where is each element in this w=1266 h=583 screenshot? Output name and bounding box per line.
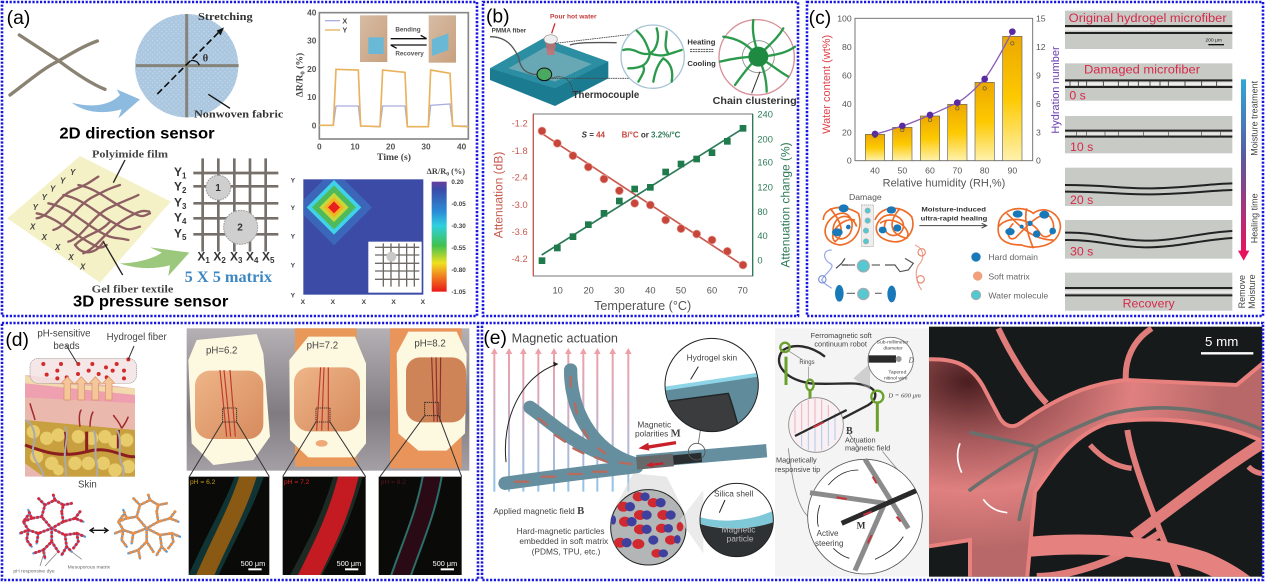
crossed gel fibers [10, 35, 105, 95]
scatter chart: attenuation vs temperature: 10 [552, 285, 563, 295]
scatter chart: attenuation vs temperature: 200 [757, 135, 773, 145]
micrograph: damaged 0 s: Damaged microfiber [1084, 62, 1200, 76]
scale bar: 5 mm [1205, 334, 1238, 349]
bar chart: water content and hydration: 60 [842, 71, 852, 81]
5 by 5 electrode grid: Y [174, 227, 182, 241]
micrograph: original: 200 μm [1205, 37, 1222, 43]
arrow: magnetic polarities: Magnetic [637, 419, 671, 429]
bar chart: water content and hydration: Water content (wt%) [821, 35, 833, 134]
colorbar: -0.55 [451, 245, 466, 252]
5 by 5 electrode grid: Y [174, 165, 182, 179]
scatter chart: attenuation vs temperature: 40 [645, 285, 656, 295]
line chart: bending response: 10 [307, 92, 317, 102]
polyimide film with gel fiber textile: Polyimide film [92, 149, 168, 160]
circle: actuation field detail: Actuation [845, 436, 876, 445]
polyimide film with gel fiber textile: Y [50, 185, 56, 194]
panel: ferromagnetic continuum robot: Sub-millimeter [877, 339, 909, 345]
polyimide film with gel fiber textile: X [67, 253, 74, 262]
panel label d: (d) [5, 330, 29, 351]
arrowheads [491, 348, 632, 354]
colorbar: -0.05 [451, 201, 466, 208]
heading: 3D pressure sensor: 3D pressure sensor [73, 294, 228, 311]
dendrite labels: pH responsive dye [13, 569, 55, 575]
line chart: bending response: ΔR/R [295, 75, 306, 97]
line chart: bending response: Recovery [395, 50, 424, 57]
scatter chart: attenuation vs temperature: -4.2 [512, 254, 528, 264]
5 by 5 electrode grid: 4 [254, 256, 259, 265]
polyimide film with gel fiber textile: Y [70, 168, 76, 177]
photo: patches at three pH values: pH=8.2 [414, 339, 446, 350]
5 by 5 electrode grid: X [230, 250, 238, 264]
5 by 5 electrode grid: Y [174, 196, 182, 210]
arrow: healing time [1238, 79, 1249, 261]
arrow: magnetic polarities [635, 419, 681, 468]
soft continuum robot deflection [505, 362, 767, 483]
white motion arrows [958, 443, 1007, 513]
polyimide film with gel fiber textile: Y [33, 203, 39, 212]
line chart: bending response: 30 [307, 36, 317, 46]
arrow: magnetic polarities: polarities M [635, 429, 681, 440]
line chart: bending response: 40 [307, 7, 317, 17]
5 by 5 electrode grid: Y [174, 211, 182, 225]
image: robot steering in vessels [927, 327, 1266, 583]
micrograph: 30 s [1065, 220, 1232, 259]
colorbar: -0.30 [451, 223, 466, 230]
legend: Hard domain [988, 252, 1038, 262]
bar chart: water content and hydration: 70 [953, 165, 962, 175]
circle: active steering: Magnetically [776, 456, 817, 465]
fluorescence image: pH 6.2: 500 μm [241, 559, 265, 568]
bar chart: water content and hydration: 60 [925, 165, 935, 175]
scatter chart: attenuation vs temperature: Attenuation change (%) [778, 142, 792, 268]
line chart: bending response: 20 [307, 64, 317, 74]
micrograph: original [1065, 11, 1232, 49]
scatter chart: attenuation vs temperature: -1.2 [512, 119, 528, 129]
circle: hard-magnetic particles: Hard-magnetic particles [517, 526, 605, 536]
arrow: blue [72, 89, 140, 118]
polymer network before healing: Damage [849, 192, 882, 202]
bar chart: water content and hydration: 80 [980, 165, 990, 175]
bar chart: water content and hydration: 15 [1036, 13, 1046, 23]
micrograph: 20 s [1065, 168, 1232, 207]
circle: polymer network before heating [621, 25, 684, 88]
heatmap: pressure map: Y [291, 234, 296, 241]
5 by 5 electrode grid: 1 [215, 183, 221, 194]
circle: hydrogel skin detail: Hydrogel skin [687, 353, 737, 363]
polymer network after healing [998, 208, 1060, 248]
side labels: Moisture [1247, 274, 1257, 309]
bar chart: water content and hydration: 100 [837, 13, 852, 23]
catheter branches [970, 408, 1266, 519]
scatter chart: attenuation vs temperature: -3.0 [512, 200, 528, 210]
vessel network [927, 328, 1266, 583]
polyimide film with gel fiber textile: X [79, 262, 86, 271]
scatter chart: attenuation vs temperature: 70 [737, 285, 748, 295]
nonwoven fabric disc: Stretching [198, 12, 254, 23]
panel: ferromagnetic continuum robot: continuum robot [814, 340, 867, 349]
circle: actuation field detail [789, 398, 890, 453]
arrow: moisture-induced healing: Moisture-induced [921, 206, 986, 213]
panel: ferromagnetic continuum robot [775, 328, 930, 577]
circle: hard-magnetic particles: Applied magnetic field B [493, 506, 584, 517]
polymer network before healing [823, 192, 913, 247]
5 by 5 electrode grid: 2 [182, 186, 187, 195]
line chart: bending response [295, 7, 468, 163]
line chart: bending response: 10 [350, 141, 360, 151]
circle: silica shell and magnetic particle: Magnetic [722, 525, 755, 535]
circle: hydrogel skin detail [665, 338, 760, 460]
legend: Water molecule [988, 290, 1048, 300]
circle: chain clustering: Chain clustering [713, 96, 797, 107]
panel: ferromagnetic continuum robot: Rings [799, 360, 815, 366]
nonwoven fabric disc: θ [203, 53, 209, 64]
micrograph: original: Original hydrogel microfiber [1069, 11, 1227, 25]
bar chart: water content and hydration: 40 [870, 165, 880, 175]
dendritic particle without dye [115, 495, 180, 558]
heading: 2D direction sensor: 2D direction sensor [59, 126, 215, 143]
circle: actuation field detail: magnetic field [845, 444, 890, 453]
fluorescence image: pH 6.2 [188, 476, 270, 575]
line chart: bending response: Bending [395, 27, 421, 34]
scatter chart: attenuation vs temperature: 160 [757, 158, 773, 168]
matrix label: 5 X 5 matrix [185, 269, 272, 286]
arrow: moisture-induced healing: ultra-rapid healing [921, 216, 987, 223]
heating and cooling arrows [687, 38, 716, 68]
water tray setup [490, 13, 640, 106]
scatter chart: attenuation vs temperature: 30 [614, 285, 625, 295]
applied magnetic field arrows [494, 353, 628, 492]
circle: hard-magnetic particles: (PDMS, TPU, etc.) [532, 547, 601, 557]
line chart: bending response: (%) [295, 53, 306, 71]
micrograph: damaged 0 s [1065, 62, 1232, 102]
heatmap: pressure map: X [421, 299, 426, 306]
heatmap: pressure map: Y [291, 292, 296, 299]
panel label c: (c) [809, 8, 831, 29]
5 by 5 electrode grid: X [246, 250, 254, 264]
bar chart: water content and hydration: 0 [1036, 156, 1041, 166]
bar chart: water content and hydration: 50 [898, 165, 907, 175]
panel label e: (e) [483, 328, 507, 349]
scatter chart: attenuation vs temperature: Attenuation (dB) [492, 152, 506, 238]
lower vessel [1030, 545, 1247, 583]
5 by 5 electrode grid: Y [174, 180, 182, 194]
panel: ferromagnetic continuum robot: Ferromagnetic soft [811, 331, 872, 340]
colorbar [427, 167, 466, 296]
nonwoven fabric disc [135, 12, 284, 120]
side labels: Healing time [1249, 193, 1259, 243]
heatmap: pressure map: X [362, 299, 367, 306]
bar chart: water content and hydration [821, 13, 1062, 190]
fluorescence image: pH 7.2: 500 μm [337, 559, 361, 568]
scatter chart: attenuation vs temperature: 20 [583, 285, 594, 295]
scatter chart: attenuation vs temperature: 0 [757, 255, 763, 265]
bar chart: water content and hydration: 12 [1036, 42, 1046, 52]
legend [971, 252, 1048, 300]
side labels: Remove [1237, 275, 1247, 308]
polyimide film with gel fiber textile: X [29, 222, 36, 231]
photo: patches at three pH values: pH=6.2 [206, 345, 237, 356]
water tray setup: Thermocouple [573, 90, 640, 101]
5 by 5 electrode grid: 4 [182, 217, 187, 226]
panel: (e) magnetic actuation [483, 328, 930, 577]
bar chart: water content and hydration: 6 [1036, 99, 1041, 109]
nonwoven fabric disc: Nonwoven fabric [194, 109, 284, 120]
5 by 5 electrode grid: 1 [205, 256, 210, 265]
scatter chart: attenuation vs temperature: 50 [676, 285, 686, 295]
heating and cooling arrows: Heating [687, 38, 716, 47]
heatmap: pressure map [291, 169, 426, 306]
arrow: green [120, 247, 189, 276]
circle: silica shell and magnetic particle: particle [727, 534, 754, 544]
heatmap: pressure map: Y [291, 262, 296, 269]
scatter chart: attenuation vs temperature: 120 [757, 183, 773, 193]
heatmap: pressure map: Y [291, 205, 296, 212]
line chart: bending response: 0 [312, 121, 317, 131]
circle: actuation field detail: B [846, 426, 853, 437]
zoom connector lines [189, 416, 462, 477]
bar chart: water content and hydration: 0 [847, 156, 852, 166]
main vessel [927, 359, 1266, 583]
scatter chart: attenuation vs temperature: Temperature (°C) [594, 299, 691, 313]
colorbar: 0 [446, 171, 449, 177]
scatter chart: attenuation vs temperature: -2.4 [512, 173, 528, 183]
photo: patches at three pH values: pH=7.2 [307, 340, 338, 351]
5 by 5 electrode grid: X [197, 250, 205, 264]
colorbar: -1.05 [451, 289, 466, 296]
circle: hard-magnetic particles: embedded in soft matrix [519, 536, 609, 546]
panel: (c) moisture healing [809, 8, 1259, 311]
skin block with hydrogel fiber: pH-sensitive [37, 329, 90, 340]
circle: active steering: M [857, 521, 866, 531]
water tray setup: PMMA fiber [492, 28, 527, 35]
skin block with hydrogel fiber: Skin [78, 480, 97, 491]
panel: (d) pH sensing [5, 328, 469, 583]
heating and cooling arrows: Cooling [687, 59, 716, 68]
polyimide film with gel fiber textile: Gel fiber textile [92, 285, 174, 296]
heatmap: pressure map: Y [291, 178, 296, 185]
fluorescence image: pH 7.2: pH = 7.2 [284, 479, 310, 486]
line chart: bending response: 0 [317, 141, 322, 151]
scatter chart: attenuation vs temperature: 60 [707, 285, 717, 295]
double-headed arrow [90, 528, 108, 533]
micrograph: 30 s: 30 s [1070, 245, 1093, 259]
5 by 5 electrode grid: 1 [182, 171, 187, 180]
legend: Soft matrix [988, 271, 1030, 281]
dendrite labels [13, 550, 111, 575]
dark background [929, 327, 1262, 577]
circle: chain clustering [713, 20, 797, 107]
colorbar: 0.20 [451, 179, 464, 186]
scatter chart: attenuation vs temperature: -3.6 [512, 227, 528, 237]
scatter chart: attenuation vs temperature: 240 [757, 109, 773, 119]
panel: ferromagnetic continuum robot: D [908, 355, 915, 364]
scatter chart: attenuation vs temperature [492, 109, 792, 313]
bar chart: water content and hydration: 20 [842, 127, 852, 137]
scatter chart: attenuation vs temperature: -1.8 [512, 146, 528, 156]
line chart: bending response: 20 [386, 141, 396, 151]
photo: patches at three pH values [187, 328, 469, 471]
circle: silica shell and magnetic particle: Silica shell [714, 489, 753, 499]
heatmap: pressure map: X [391, 299, 396, 306]
dendrite labels: Mesoporous matrix [68, 565, 111, 571]
water tray setup: Pour hot water [550, 13, 597, 20]
micrograph: damaged 0 s: 0 s [1069, 88, 1086, 102]
circle: hard-magnetic particles [493, 473, 687, 565]
circle: active steering: Active [817, 529, 839, 538]
circle: silica shell and magnetic particle [680, 483, 775, 560]
bar chart: water content and hydration: 90 [1008, 165, 1017, 175]
heading: magnetic actuation: Magnetic actuation [512, 331, 618, 345]
5 by 5 electrode grid: X [213, 250, 221, 264]
circle: active steering: steering [815, 539, 843, 548]
bar chart: water content and hydration: 40 [842, 99, 852, 109]
bar chart: water content and hydration: Hydration number [1050, 46, 1062, 134]
fluorescence image: pH 8.2: pH = 8.2 [381, 479, 406, 486]
polyimide film with gel fiber textile: X [41, 233, 48, 242]
polyimide film with gel fiber textile: Y [60, 176, 66, 185]
bar chart: water content and hydration: 80 [842, 42, 852, 52]
bar chart: water content and hydration: 3 [1036, 127, 1041, 137]
line chart: bending response: 30 [421, 141, 431, 151]
5 by 5 electrode grid: 5 [270, 256, 275, 265]
panel: ferromagnetic continuum robot: nitinol wire [884, 375, 908, 381]
5 by 5 electrode grid: 2 [237, 223, 243, 234]
heatmap: pressure map: X [331, 299, 336, 306]
colorbar: -0.80 [451, 267, 466, 274]
polyimide film with gel fiber textile: Y [42, 193, 48, 202]
panel: (b) thermal sensing [486, 7, 797, 313]
line chart: bending response: X [342, 16, 347, 25]
5 by 5 electrode grid: 3 [182, 202, 187, 211]
panel label a: (a) [7, 8, 30, 29]
colorbar: ΔR/R [427, 167, 446, 176]
heatmap: pressure map: X [301, 299, 306, 306]
side labels [1237, 80, 1259, 309]
arrow: moisture-induced healing [919, 206, 987, 228]
skin block with hydrogel fiber: Hydrogel fiber [107, 332, 168, 343]
circle: active steering [775, 430, 922, 574]
line chart: bending response: Time (s) [377, 152, 411, 163]
skin block with hydrogel fiber [25, 329, 168, 491]
thin vessels [998, 328, 1262, 577]
fluorescence image: pH 6.2: pH = 6.2 [190, 479, 216, 486]
polyimide film with gel fiber textile [7, 149, 174, 296]
line chart: bending response: 40 [457, 141, 467, 151]
panel: ferromagnetic continuum robot: diameter [883, 345, 903, 351]
scatter chart: attenuation vs temperature: S = 44 B/°C or 3.2%/°C [582, 130, 681, 139]
polyimide film with gel fiber textile: X [54, 243, 61, 252]
skin block with hydrogel fiber: beads [53, 341, 80, 352]
circle: active steering: responsive tip [775, 465, 820, 474]
panel: ferromagnetic continuum robot: Tapered [888, 369, 907, 375]
fluorescence image: pH 8.2 [378, 476, 462, 575]
5 by 5 electrode grid: 2 [221, 256, 226, 265]
micrograph: 10 s: 10 s [1070, 140, 1093, 154]
panel: ferromagnetic continuum robot: D = 600 μm [887, 392, 921, 399]
5 by 5 electrode grid: 3 [238, 256, 243, 265]
line chart: bending response: 0 [299, 71, 306, 75]
micrograph: recovery [1065, 273, 1232, 311]
micrograph: recovery: Recovery [1123, 297, 1176, 311]
scatter chart: attenuation vs temperature: 80 [757, 207, 768, 217]
micrograph: 10 s [1065, 116, 1232, 154]
side labels: Moisture treatment [1249, 80, 1259, 156]
bar chart: water content and hydration: 9 [1036, 71, 1041, 81]
chemical interactions diagram [819, 245, 925, 302]
dendritic particle with dye [20, 495, 85, 558]
scale bar [1201, 334, 1253, 353]
colorbar: (%) [449, 167, 465, 176]
scatter chart: attenuation vs temperature: 40 [757, 231, 768, 241]
5 by 5 electrode grid: 5 [182, 233, 187, 242]
fluorescence image: pH 8.2: 500 μm [433, 559, 457, 568]
panel label b: (b) [486, 7, 510, 28]
micrograph: 20 s: 20 s [1070, 193, 1093, 207]
bar chart: water content and hydration: Relative humidity (RH,%) [883, 178, 1005, 190]
5 by 5 electrode grid: X [262, 250, 270, 264]
fluorescence image: pH 7.2 [282, 476, 366, 575]
5 by 5 electrode grid [174, 158, 278, 265]
panel: (a) strain and pressure sensors [7, 7, 468, 311]
line chart: bending response: Y [342, 25, 347, 34]
